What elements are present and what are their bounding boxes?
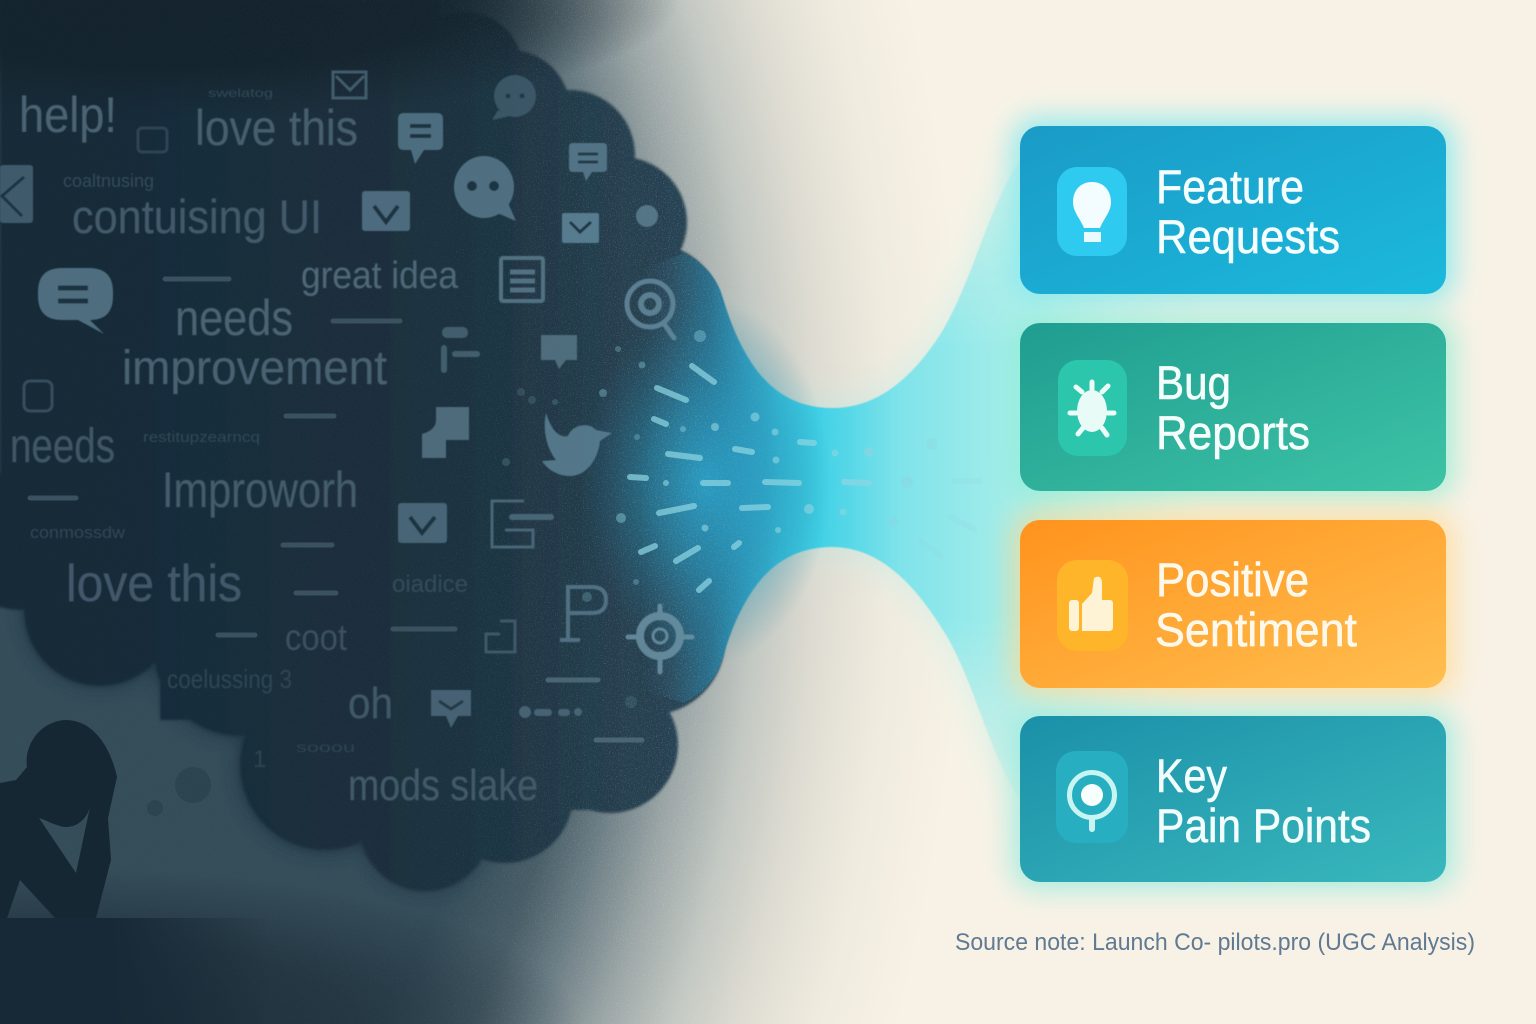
- icon: round bubble: [492, 75, 536, 120]
- cloud of feedback noise: [0, 0, 725, 891]
- icon: G box: [492, 501, 551, 547]
- noisy feedback words: restitupzearncq: [143, 429, 260, 446]
- icon: bug: [1058, 360, 1127, 456]
- dash marks: [30, 279, 642, 740]
- noisy feedback words: great idea: [301, 255, 459, 297]
- label: Feature: [1156, 160, 1304, 213]
- card glows: [1012, 118, 1454, 889]
- card: Bug Reports: [1020, 323, 1446, 491]
- label: Pain Points: [1156, 799, 1371, 852]
- icon: small mail: [562, 213, 599, 243]
- top shade: [0, 0, 680, 125]
- core glow: [580, 297, 830, 667]
- noisy feedback words: coot: [285, 617, 348, 658]
- noisy feedback words: contuising UI: [72, 190, 322, 243]
- icon: big bubble: [454, 156, 516, 221]
- label: [1156, 160, 1340, 263]
- noisy feedback words: improvement: [122, 342, 387, 395]
- soft cloud shadow: [22, 532, 491, 891]
- icon: bird: [542, 413, 612, 476]
- noisy feedback words: love this: [195, 100, 358, 156]
- icon: crosshair: [628, 606, 692, 672]
- noisy feedback words: swelatog: [208, 86, 273, 100]
- noisy feedback words: conmossdw: [30, 523, 126, 542]
- icon: pin target: [1056, 751, 1128, 843]
- label: Bug: [1156, 356, 1231, 409]
- noisy feedback words: Improworh: [162, 462, 358, 518]
- funnel glow halo: [730, 155, 1024, 805]
- source note: Source note: Launch Co- pilots.pro (UGC Analysis): [955, 929, 1475, 956]
- icon: corner box: [486, 621, 515, 652]
- noisy feedback words: needs: [175, 290, 293, 346]
- label: Requests: [1156, 210, 1340, 263]
- noisy feedback words: mods slake: [348, 761, 538, 810]
- label: Key: [1156, 749, 1227, 802]
- icon: square outline: [138, 128, 167, 152]
- film grain: [198, 0, 814, 1024]
- icon: filled mail: [362, 191, 410, 231]
- label: [1156, 356, 1310, 459]
- icon: small app square: [24, 381, 52, 411]
- scattered particles: [502, 330, 938, 708]
- icon: P glyph: [560, 587, 606, 640]
- icon: lower chat: [431, 690, 471, 728]
- noisy feedback words: help!: [19, 87, 117, 143]
- data streaks: [630, 366, 979, 590]
- dark spots in haze: [147, 767, 211, 816]
- label: [1156, 749, 1371, 852]
- icon: list glyph: [441, 327, 480, 373]
- noisy feedback words: oh: [348, 679, 393, 728]
- funnel of light: [660, 162, 1159, 794]
- label: [1155, 553, 1357, 656]
- icon: target magnifier: [627, 281, 674, 338]
- noisy feedback words: coaltnusing: [63, 171, 154, 191]
- icon: thumbs up: [1057, 560, 1128, 651]
- card: Feature Requests: [1020, 126, 1446, 294]
- icon: left chat: [38, 268, 113, 334]
- noisy feedback words: love this: [66, 555, 242, 613]
- icon: dotted line: [519, 706, 582, 718]
- silhouette of frustrated person: [0, 720, 270, 1024]
- icon: light bulb: [1057, 167, 1127, 256]
- card: Positive Sentiment: [1020, 520, 1446, 688]
- label: Positive: [1156, 553, 1309, 606]
- noisy feedback words: 1: [253, 746, 266, 773]
- icon: small chat: [569, 143, 607, 181]
- card: Key Pain Points: [1020, 716, 1446, 882]
- noisy feedback words: coelussing 3: [167, 664, 292, 694]
- noisy feedback words: sooou: [296, 739, 355, 755]
- icon: cut-off envelope: [0, 165, 33, 223]
- noisy feedback words: [10, 86, 538, 810]
- icon: stepped speech: [422, 407, 469, 458]
- icon: lower mail: [398, 503, 447, 543]
- icon: speck: [636, 205, 658, 227]
- icon: chat box: [398, 113, 443, 164]
- icon: envelope outline: [333, 72, 366, 98]
- icon: document: [501, 258, 543, 301]
- noisy feedback words: oiadice: [392, 571, 468, 598]
- label: Reports: [1156, 406, 1310, 459]
- icon: small square chat: [541, 335, 577, 369]
- noisy feedback words: needs: [10, 420, 115, 473]
- social icons: [0, 72, 692, 728]
- label: Sentiment: [1155, 603, 1357, 656]
